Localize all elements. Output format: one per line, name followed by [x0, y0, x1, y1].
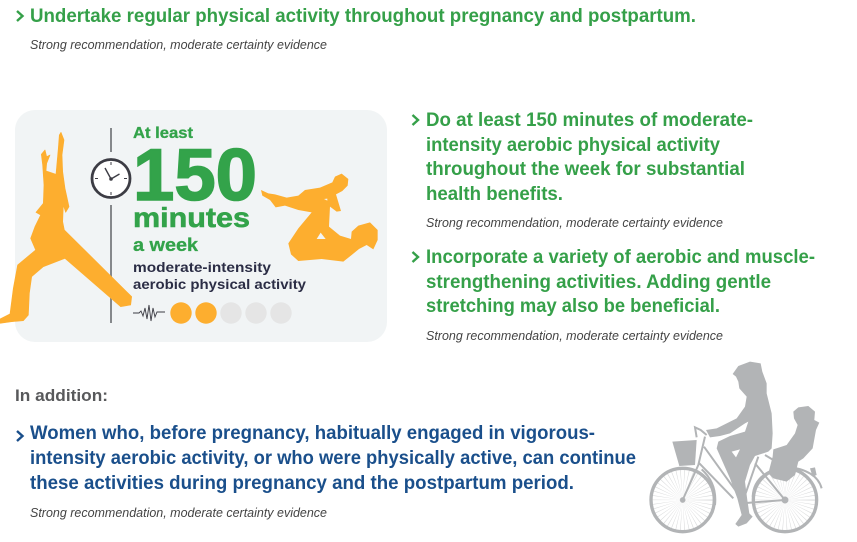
heading text: Do at least 150 minutes of moderate-	[426, 109, 753, 131]
recommendation: variety of activities: stretching may also be beneficial.	[426, 295, 720, 317]
vertical divider line	[110, 128, 112, 323]
heading text: Incorporate a variety of aerobic and muscle-	[426, 246, 815, 268]
rear wheel	[753, 468, 817, 532]
chevron arrow	[17, 11, 22, 21]
child in seat	[768, 406, 819, 482]
heading: regular physical activity: Undertake regular physical activity throughout pregnancy and postpartum.	[30, 5, 696, 27]
chevron arrow	[412, 252, 418, 262]
label: a week: a week	[133, 234, 199, 255]
label: moderate intensity: moderate-intensity	[133, 260, 272, 275]
recommendation: continuing vigorous activity	[17, 422, 636, 520]
recommendation: 150 minutes	[412, 109, 753, 230]
icon: clock	[92, 160, 130, 198]
heading text: Women who, before pregnancy, habitually engaged in vigorous-	[30, 422, 595, 444]
figure: mother lifting baby	[261, 174, 378, 262]
evidence note: Strong recommendation, moderate certainty evidence	[426, 329, 723, 343]
evidence note: Strong recommendation, moderate certainty evidence	[30, 38, 327, 52]
rider	[706, 362, 773, 527]
bicycle frame	[683, 427, 822, 505]
intensity dots	[170, 302, 292, 324]
recommendation: continuing vigorous activity: intensity aerobic activity, or who were physically active, can continue	[30, 447, 636, 469]
icon: intensity wave	[133, 305, 165, 321]
chevron arrow	[17, 431, 22, 441]
label: at least: At least	[133, 125, 193, 142]
top recommendation	[17, 5, 696, 52]
recommendation: 150 minutes: intensity aerobic physical activity	[426, 134, 720, 156]
panel background	[15, 110, 387, 342]
basket	[672, 440, 697, 466]
front wheel	[651, 468, 714, 532]
panel: 150 minutes a week	[0, 110, 387, 342]
figure: pregnant woman in yoga pose	[0, 132, 132, 323]
recommendation: 150 minutes: health benefits.	[426, 183, 563, 205]
label: minutes: minutes	[133, 202, 250, 233]
label: aerobic physical activity: aerobic physical activity	[133, 277, 307, 292]
chevron arrow	[412, 115, 418, 125]
evidence note: Strong recommendation, moderate certainty evidence	[30, 506, 327, 520]
illustration: mother and child on bicycle	[651, 362, 822, 532]
subheading: in addition: In addition:	[15, 386, 108, 405]
evidence note: Strong recommendation, moderate certainty evidence	[426, 216, 723, 230]
recommendation: variety of activities	[412, 246, 815, 343]
recommendation: 150 minutes: throughout the week for substantial	[426, 158, 745, 180]
number: 150: 150	[133, 135, 257, 216]
recommendation: continuing vigorous activity: these activities during pregnancy and the postpartum period.	[30, 472, 574, 494]
recommendation: variety of activities: strengthening activities. Adding gentle	[426, 271, 771, 293]
